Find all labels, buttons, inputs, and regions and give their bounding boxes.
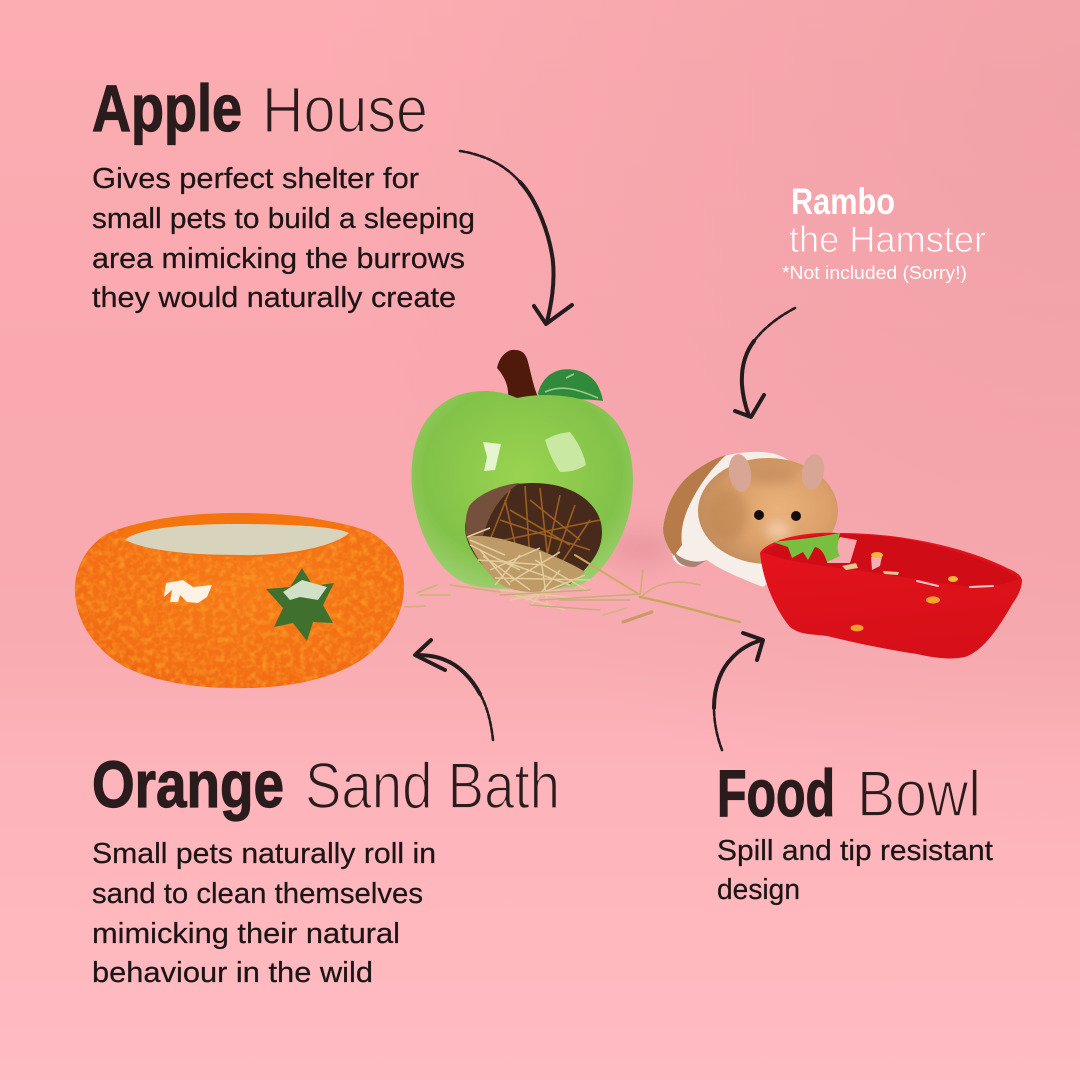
icon: apple house — [412, 350, 633, 610]
heading: Orange Sand Bath: Orange — [92, 747, 284, 821]
text block: Orange Sand Bath description: behaviour in the wild — [92, 957, 373, 989]
arrow: to orange sand bath — [415, 640, 493, 740]
hamster eyes — [754, 510, 764, 520]
heading: Rambo the Hamster: the Hamster — [789, 219, 986, 260]
text block: Orange Sand Bath description — [92, 838, 436, 989]
doorway hay mound — [467, 536, 585, 592]
heading: Rambo the Hamster — [782, 181, 986, 283]
apple doorway — [465, 483, 602, 584]
heading: Food Bowl — [717, 756, 981, 830]
icon: strawberry food bowl — [760, 533, 1022, 658]
text block: Apple House description: small pets to build a sleeping — [92, 203, 475, 235]
hamster ears — [726, 453, 754, 493]
text block: Orange Sand Bath description: mimicking their natural — [92, 918, 400, 950]
text block: Apple House description: they would naturally create — [92, 282, 456, 314]
hamster back patch — [663, 455, 726, 556]
heading: Apple House: House — [262, 73, 428, 146]
apple body — [412, 391, 633, 589]
heading: Rambo the Hamster: *Not included (Sorry!) — [782, 263, 967, 283]
arrow: to food bowl — [714, 633, 763, 750]
text block: Apple House description — [92, 163, 475, 314]
bowl crumbs — [842, 563, 899, 575]
icon: hamster — [663, 452, 838, 587]
text block: Apple House description: Gives perfect shelter for — [92, 163, 419, 195]
heading: Food Bowl: Food — [717, 756, 835, 830]
heading: Food Bowl: Bowl — [857, 757, 981, 830]
arrow: to apple house — [460, 151, 572, 324]
bowl body — [760, 533, 1022, 658]
hamster head and cheeks — [698, 458, 838, 564]
heading: Rambo the Hamster: Rambo — [791, 181, 895, 222]
orange highlight — [164, 580, 212, 603]
orange rim — [120, 513, 351, 557]
bowl reflections — [827, 537, 857, 563]
bowl leaves — [773, 533, 840, 562]
orange star calyx — [266, 568, 334, 641]
heading: Apple House: Apple — [92, 71, 242, 145]
text block: Orange Sand Bath description: sand to clean themselves — [92, 878, 423, 910]
text block: Food Bowl description: design — [717, 874, 800, 906]
orange body — [75, 514, 404, 688]
product shadow — [606, 532, 674, 564]
text block: Food Bowl description: Spill and tip resistant — [717, 835, 993, 867]
icon: orange sand bath — [75, 513, 404, 688]
hamster body — [663, 452, 795, 587]
heading: Apple House — [92, 71, 428, 146]
bowl seeds — [926, 596, 940, 604]
orange peel texture — [75, 514, 404, 688]
text block: Apple House description: area mimicking the burrows — [92, 243, 465, 275]
orange interior — [125, 524, 349, 555]
apple leaf — [538, 369, 603, 401]
arrow: to hamster — [735, 308, 795, 417]
apple highlights — [483, 442, 501, 471]
text block: Orange Sand Bath description: Small pets naturally roll in — [92, 838, 436, 870]
bowl interior — [763, 534, 1019, 587]
text block: Food Bowl description — [717, 835, 993, 906]
heading: Orange Sand Bath — [92, 747, 560, 822]
apple stem — [497, 350, 538, 400]
scattered hay — [405, 555, 740, 622]
hamster foot — [674, 552, 707, 567]
doorway hay back strands — [480, 486, 600, 565]
heading: Orange Sand Bath: Sand Bath — [305, 749, 560, 822]
hamster muzzle — [766, 521, 790, 539]
